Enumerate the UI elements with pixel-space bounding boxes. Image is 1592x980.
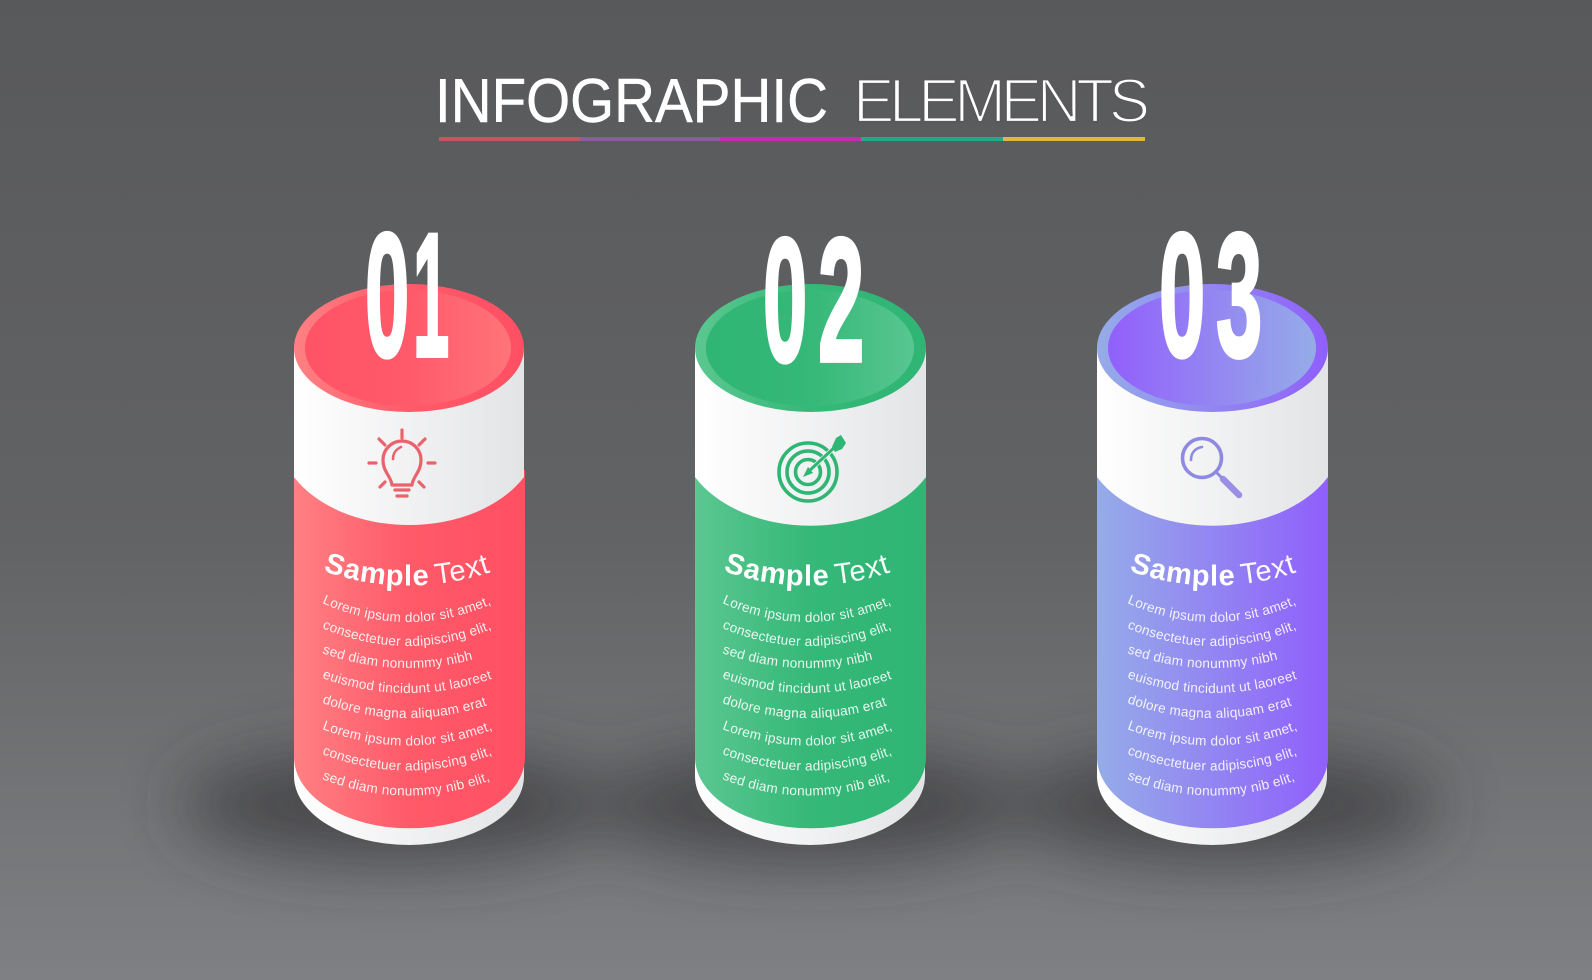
heading: Sample Text: SampleText xyxy=(725,554,890,591)
body text: consectetuer adipiscing elit, xyxy=(1128,622,1296,648)
body text: euismod tincidunt ut laoreet xyxy=(723,670,892,694)
body text: euismod tincidunt ut laoreet xyxy=(323,670,492,694)
body text: Lorem ipsum dolor sit amet, xyxy=(723,720,892,746)
number 01 xyxy=(365,197,449,395)
body text: sed diam nonummy nibh xyxy=(1128,646,1277,669)
number 02: 0 xyxy=(763,202,807,400)
number 01: 0 xyxy=(365,197,409,395)
body text: Lorem ipsum dolor sit amet, xyxy=(1128,720,1297,746)
top inner ellipse xyxy=(305,290,511,406)
top inner ellipse xyxy=(706,290,914,406)
top rim xyxy=(294,284,524,412)
number 02: 2 xyxy=(818,202,864,399)
title xyxy=(435,67,1148,136)
title: INFOGRAPHIC: INFOGRAPHIC xyxy=(435,67,828,136)
top rim xyxy=(1097,284,1328,412)
white band xyxy=(1097,348,1328,526)
body text: sed diam nonummy nib elit, xyxy=(722,773,890,796)
body text: Lorem ipsum dolor sit amet, xyxy=(1128,594,1296,622)
body text: dolore magna aliquam erat xyxy=(1128,695,1292,720)
heading: Sample Text: SampleText xyxy=(1131,554,1296,591)
cylinder body xyxy=(1097,470,1328,828)
cylinder base xyxy=(1097,750,1327,845)
heading: Sample Text: SampleText xyxy=(325,554,490,591)
title underline xyxy=(439,137,1145,141)
body text: sed diam nonummy nibh xyxy=(322,646,472,669)
body text xyxy=(322,594,492,796)
white band xyxy=(294,348,524,525)
body text: dolore magna aliquam erat xyxy=(723,695,887,720)
body text: consectetuer adipiscing elit, xyxy=(723,622,891,648)
body text: euismod tincidunt ut laoreet xyxy=(1128,670,1297,694)
top rim xyxy=(695,284,926,412)
icon: target xyxy=(779,435,846,501)
panel: cylinder 03 xyxy=(1097,197,1328,845)
panel: cylinder 01 xyxy=(294,197,525,845)
body text: Lorem ipsum dolor sit amet, xyxy=(323,720,492,746)
number 01: 1 xyxy=(413,198,449,394)
body text xyxy=(1128,594,1297,796)
body text: Lorem ipsum dolor sit amet, xyxy=(323,594,491,622)
top inner ellipse xyxy=(1108,290,1316,406)
body text: dolore magna aliquam erat xyxy=(323,695,487,720)
title: ELEMENTS: ELEMENTS xyxy=(853,67,1148,136)
icon: light bulb xyxy=(369,430,435,496)
cylinder body xyxy=(294,470,525,828)
white band xyxy=(695,348,926,526)
number 03: 0 xyxy=(1159,197,1205,394)
icon: magnifying glass xyxy=(1182,438,1239,495)
body text: consectetuer adipiscing elit, xyxy=(1128,748,1296,773)
body text: consectetuer adipiscing elit, xyxy=(723,748,892,773)
number 03: 3 xyxy=(1216,197,1262,394)
cylinder body xyxy=(695,470,926,828)
floor shadows xyxy=(180,750,1440,860)
number 02 xyxy=(763,202,864,400)
cylinder base xyxy=(695,750,925,845)
body text: sed diam nonummy nib elit, xyxy=(1128,773,1294,796)
body text xyxy=(722,594,892,796)
body text: sed diam nonummy nibh xyxy=(722,646,872,669)
number 03 xyxy=(1159,197,1262,394)
body text: consectetuer adipiscing elit, xyxy=(323,622,491,648)
panel: cylinder 02 xyxy=(695,202,926,845)
body text: consectetuer adipiscing elit, xyxy=(323,748,492,773)
body text: Lorem ipsum dolor sit amet, xyxy=(723,594,891,622)
cylinder base xyxy=(294,750,524,845)
body text: sed diam nonummy nib elit, xyxy=(322,773,490,796)
